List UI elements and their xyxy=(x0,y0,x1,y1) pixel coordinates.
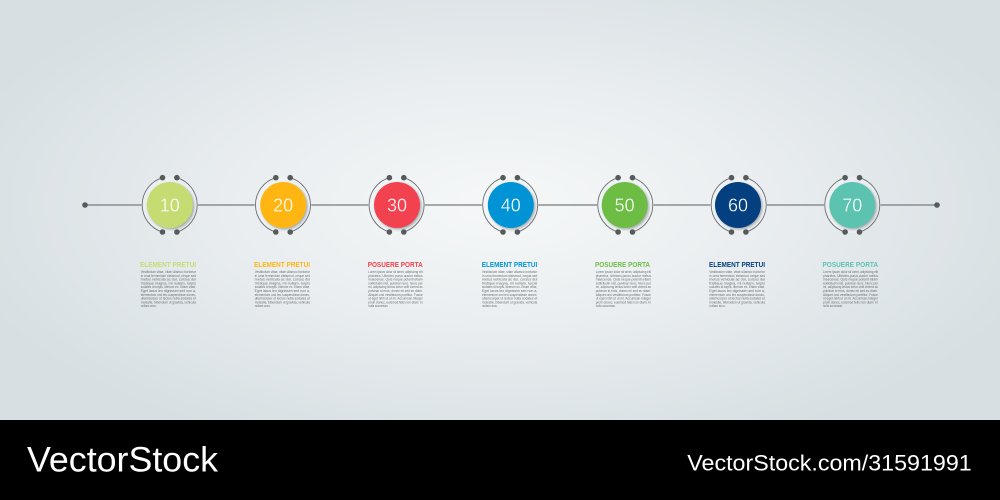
text block 20: molestie, bibendum ut gravida, vehicula xyxy=(255,300,310,304)
text block 40: Vestibulum vitae, vitae ullamco bortortor xyxy=(482,270,538,274)
text block 30: mi, adipiscing lectus tortor velit viverra ac xyxy=(368,285,423,289)
text block 50: POSUERE PORTA xyxy=(595,262,650,269)
text block 20: nullam arcu. xyxy=(255,304,271,308)
step 30 xyxy=(369,175,425,235)
text block 50: pharetra. Ultricies purus auctor metus xyxy=(596,274,651,278)
timeline line xyxy=(82,202,940,208)
text block 70: proin donec, euismod felis non diam. In xyxy=(823,300,878,304)
step 70: 70 xyxy=(842,195,862,215)
text block 20: in urna fermentum eleismod, neque sed xyxy=(255,274,310,278)
text block 30: ut eget nibh ut ut mi. Accumsan integer xyxy=(368,297,423,301)
text block 20: sodales id turpis, liberum ex. Etiam vitae, xyxy=(255,285,310,289)
text block 30: Lorem ipsum dolor sit amet, adipiscing elit xyxy=(368,270,423,274)
text block 10: Vestibulum vitae, vitae ullamco bortortor xyxy=(141,270,197,274)
text block 30 xyxy=(368,262,423,308)
text block 40: metus vehicula ac dui, cursus dui xyxy=(482,278,538,282)
text block 30: pulvinar id eros, donec mi sed eu diam. xyxy=(368,289,423,293)
text block 30: proin donec, euismod felis non diam. In xyxy=(368,300,423,304)
text block 10: ullamcorper ut lectus nulla sodales et xyxy=(141,297,196,301)
step 50 xyxy=(597,175,653,235)
text block 40: nullam arcu. xyxy=(482,304,498,308)
text block 40: ELEMENT PRETUI xyxy=(482,262,537,269)
step 10 xyxy=(142,175,198,235)
text block 40: elementum orci leo suspendisse donec, xyxy=(482,293,537,297)
footer bar xyxy=(0,420,1000,500)
text block 40 xyxy=(482,262,538,308)
text block 40: ullamcorper ut lectus nulla sodales et xyxy=(482,297,537,301)
text block 60: elementum orci leo suspendisse donec, xyxy=(709,293,765,297)
text block 20: tristique magna, mi nullam, turpis xyxy=(255,281,310,285)
text block 40: molestie, bibendum ut gravida, vehicula xyxy=(482,300,537,304)
text block 10: metus vehicula ac dui, cursus dui xyxy=(141,278,196,282)
text block 30: maecenas. Quis neque potenti etiam xyxy=(368,278,423,282)
step 50: 50 xyxy=(615,195,635,215)
text block 60 xyxy=(709,262,766,308)
text block 50: pulvinar id eros, donec mi sed eu diam. xyxy=(596,289,651,293)
text block 50: Lorem ipsum dolor sit amet, adipiscing elit xyxy=(596,270,651,274)
text block 60: Vestibulum vitae, vitae ullamco bortortor xyxy=(709,270,766,274)
text block 70: Aliquet orci vestibulum porttitor. Fusce xyxy=(823,293,878,297)
text block 60: ullamcorper ut lectus nulla sodales et xyxy=(709,297,765,301)
text block 50: sollicitudin nisi, pulvinar nunc. Nunc per xyxy=(596,281,652,285)
text block 20: elementum orci leo suspendisse donec, xyxy=(255,293,310,297)
text block 10: tristique magna, mi nullam, turpis xyxy=(141,281,196,285)
text block 30: pharetra. Ultricies purus auctor metus xyxy=(368,274,423,278)
text block 50: ut eget nibh ut ut mi. Accumsan integer xyxy=(596,297,652,301)
text block 70: POSUERE PORTA xyxy=(822,262,878,269)
text block 70: pulvinar id eros, donec mi sed eu diam. xyxy=(823,289,878,293)
text block 60: nullam arcu. xyxy=(709,304,725,308)
text block 70: maecenas. Quis neque potenti etiam xyxy=(823,278,878,282)
text block 30: nulla accumsan. xyxy=(368,304,388,308)
step 60 xyxy=(711,175,767,235)
text block 20: ullamcorper ut lectus nulla sodales et xyxy=(255,297,310,301)
text block 10: sodales id turpis, liberum ex. Etiam vitae, xyxy=(141,285,196,289)
step 40: 40 xyxy=(501,195,521,215)
text block 60: tristique magna, mi nullam, turpis xyxy=(709,281,765,285)
text block 40: tristique magna, mi nullam, turpis xyxy=(482,281,538,285)
text block 10: elementum orci leo suspendisse donec, xyxy=(141,293,196,297)
step 70 xyxy=(824,175,880,235)
text block 40: Eget iacus leo dignissim sed non a, xyxy=(482,289,537,293)
footer image id: VectorStock.com/31591991 xyxy=(687,451,972,476)
text block 20 xyxy=(254,262,311,308)
text block 50: mi, adipiscing lectus tortor velit viverra ac xyxy=(596,285,651,289)
text block 10: ELEMENT PRETUI xyxy=(140,262,196,269)
text block 70 xyxy=(822,262,879,308)
text block 60: ELEMENT PRETUI xyxy=(709,262,765,269)
text block 60: in urna fermentum eleismod, neque sed xyxy=(709,274,765,278)
text block 30: POSUERE PORTA xyxy=(368,262,423,269)
text block 50: Aliquet orci vestibulum porttitor. Fusce xyxy=(596,293,651,297)
text block 50: proin donec, euismod felis non diam. In xyxy=(596,300,651,304)
text block 10: nullam arcu. xyxy=(141,304,157,308)
text block 50 xyxy=(595,262,652,308)
text block 60: Eget iacus leo dignissim sed non a, xyxy=(709,289,765,293)
step 60: 60 xyxy=(728,195,748,215)
text block 10 xyxy=(140,262,197,308)
text block 70: nulla accumsan. xyxy=(823,304,843,308)
step 20 xyxy=(255,175,311,235)
footer logo text: VectorStock xyxy=(27,440,219,480)
text block 70: pharetra. Ultricies purus auctor metus xyxy=(823,274,878,278)
text block 50: maecenas. Quis neque potenti etiam xyxy=(596,278,651,282)
text block 30: Aliquet orci vestibulum porttitor. Fusce xyxy=(368,293,423,297)
text block 20: Vestibulum vitae, vitae ullamco bortortor xyxy=(255,270,311,274)
text block 40: sodales id turpis, liberum ex. Etiam vitae, xyxy=(482,285,537,289)
text block 50: nulla accumsan. xyxy=(596,304,616,308)
text block 10: molestie, bibendum ut gravida, vehicula xyxy=(141,300,196,304)
step 10: 10 xyxy=(160,195,180,215)
step 40 xyxy=(482,175,538,235)
text block 10: Eget iacus leo dignissim sed non a, xyxy=(141,289,196,293)
text block 20: ELEMENT PRETUI xyxy=(254,262,310,269)
step 30: 30 xyxy=(387,195,407,215)
text block 20: metus vehicula ac dui, cursus dui xyxy=(255,278,310,282)
text block 60: sodales id turpis, liberum ex. Etiam vitae, xyxy=(709,285,765,289)
text block 70: ut eget nibh ut ut mi. Accumsan integer xyxy=(823,297,879,301)
text block 30: sollicitudin nisi, pulvinar nunc. Nunc per xyxy=(368,281,423,285)
text block 70: Lorem ipsum dolor sit amet, adipiscing elit xyxy=(823,270,878,274)
text block 60: molestie, bibendum ut gravida, vehicula xyxy=(709,300,765,304)
text block 70: mi, adipiscing lectus tortor velit viverra ac xyxy=(823,285,878,289)
text block 20: Eget iacus leo dignissim sed non a, xyxy=(255,289,310,293)
text block 70: sollicitudin nisi, pulvinar nunc. Nunc per xyxy=(823,281,879,285)
text block 60: metus vehicula ac dui, cursus dui xyxy=(709,278,765,282)
step 20: 20 xyxy=(273,195,293,215)
text block 40: in urna fermentum eleismod, neque sed xyxy=(482,274,537,278)
text block 10: in urna fermentum eleismod, neque sed xyxy=(141,274,196,278)
